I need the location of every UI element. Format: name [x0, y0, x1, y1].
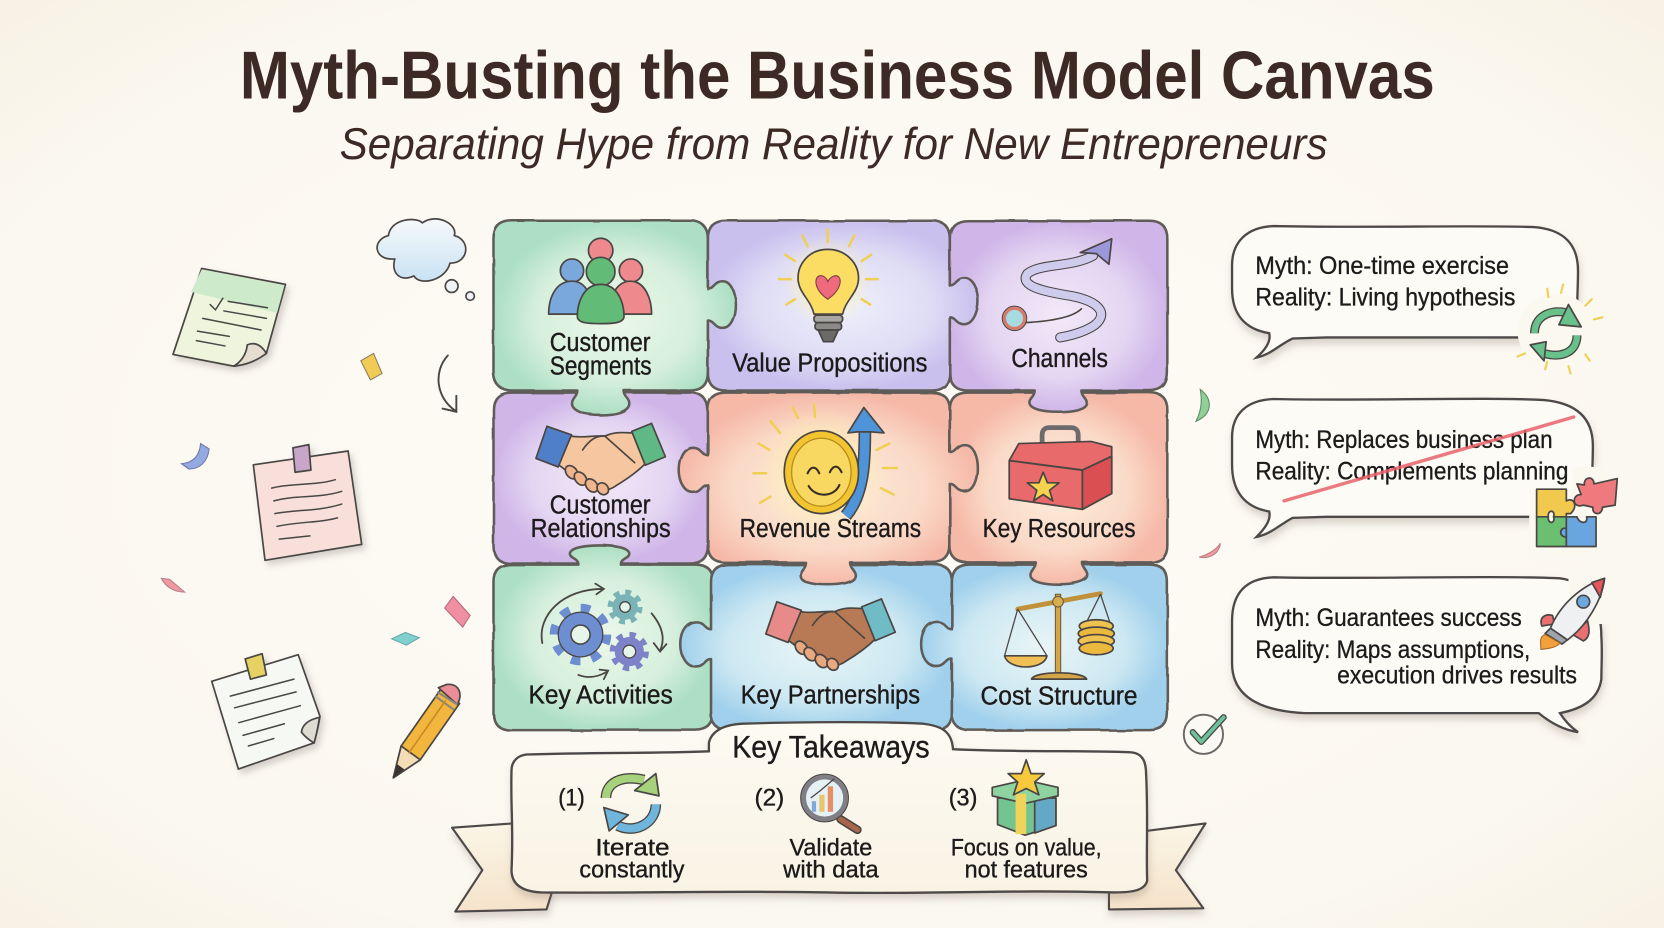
gap behind puzzle icon: [1529, 467, 1605, 556]
tile: customer segments: Segments: [550, 353, 652, 381]
label: Channels: [1011, 345, 1108, 373]
puzzle canvas: [493, 221, 1167, 730]
icon: light bulb with heart: [779, 229, 878, 342]
label: Customer: [550, 329, 651, 357]
myth and reality text: [1255, 604, 1577, 689]
myth and reality text: Myth: One-time exercise: [1255, 252, 1509, 280]
left side doodles: [161, 219, 1220, 778]
takeaway 2: (2): [755, 784, 784, 811]
tile: key resources: [950, 393, 1167, 585]
subtitle: Separating Hype from Reality for New Entrepreneurs: [340, 120, 1328, 169]
myth and reality text: execution drives results: [1337, 661, 1577, 689]
ribbon: right end: [1109, 823, 1206, 909]
gap behind refresh icon: [1518, 293, 1594, 369]
label: Cost Structure: [981, 683, 1138, 711]
tile: channels: [950, 221, 1167, 412]
tile: customer relationships: [493, 393, 708, 563]
icon: puzzle pieces: [1537, 478, 1617, 547]
curved arrow: [439, 355, 456, 412]
icon: gift box with star: [992, 760, 1058, 835]
ribbon: left end: [452, 823, 552, 912]
label: Customer: [550, 492, 651, 520]
takeaway 3: Focus on value,: [951, 834, 1102, 861]
red strike-through: [1284, 417, 1574, 501]
takeaway 1: constantly: [579, 857, 685, 884]
icon: smiling coin with arrow: [753, 404, 897, 538]
icon: rocket: [1541, 578, 1605, 649]
icon: handshake: [766, 599, 895, 673]
sticky note: green: [173, 268, 285, 366]
pencil: [393, 684, 460, 778]
tile: revenue streams: [679, 393, 977, 585]
label: Key Partnerships: [741, 682, 920, 710]
icon: gears: [542, 584, 666, 679]
title: Myth-Busting the Business Model Canvas: [240, 39, 1435, 114]
tile: customer relationships: Relationships: [531, 515, 671, 543]
myth and reality text: [1255, 252, 1515, 312]
speech bubble: guarantees success: [1232, 569, 1613, 732]
tile: key activities: [493, 545, 713, 730]
takeaway 1: (1): [558, 784, 585, 811]
speech bubble: replaces business plan: [1232, 399, 1617, 556]
takeaway 2: with data: [782, 857, 879, 884]
sticky note: white: [212, 654, 320, 769]
label: Revenue Streams: [740, 515, 921, 543]
icon: balance scale: [1005, 594, 1114, 679]
takeaway 2: Validate: [790, 834, 872, 861]
icon: magnifier with chart: [801, 774, 857, 830]
icon: group of people: [549, 238, 652, 324]
gap behind rocket icon: [1568, 569, 1613, 624]
icon: check mark badge: [1184, 715, 1224, 754]
label: Key Resources: [983, 515, 1135, 543]
myth and reality text: Reality: Living hypothesis: [1255, 284, 1515, 312]
icon: iterate arrows: [604, 774, 659, 831]
takeaway 2: [755, 774, 879, 884]
tile: key partnerships: [680, 565, 952, 730]
takeaway 3: not features: [965, 857, 1088, 884]
myth and reality text: Reality: Maps assumptions,: [1255, 636, 1530, 664]
thought cloud: [377, 219, 474, 300]
tile: cost structure: [921, 565, 1167, 730]
banner body: [511, 722, 1147, 893]
speech bubble: one-time exercise: [1232, 226, 1602, 374]
icon: winding channel arrow: [1002, 239, 1112, 337]
myth and reality text: Myth: Replaces business plan: [1255, 426, 1553, 454]
heading: Key Takeaways: [732, 729, 930, 765]
takeaway 3: (3): [949, 784, 977, 811]
takeaway 1: [558, 774, 685, 884]
label: Value Propositions: [732, 349, 928, 377]
tile: customer segments: [493, 221, 735, 415]
myth and reality text: [1255, 426, 1568, 486]
icon: refresh arrows: [1518, 284, 1602, 374]
banner: key takeaways: [452, 722, 1206, 912]
sticky note: pink: [253, 445, 362, 560]
takeaway 1: Iterate: [595, 834, 670, 861]
icon: toolbox: [1009, 428, 1112, 509]
confetti: [161, 353, 1220, 645]
takeaway 3: [949, 760, 1102, 884]
myth and reality text: Myth: Guarantees success: [1255, 604, 1522, 632]
label: Key Activities: [529, 682, 673, 710]
tile: value propositions: [708, 221, 978, 391]
icon: handshake: [536, 423, 665, 497]
myth and reality text: Reality: Complements planning: [1255, 458, 1568, 486]
